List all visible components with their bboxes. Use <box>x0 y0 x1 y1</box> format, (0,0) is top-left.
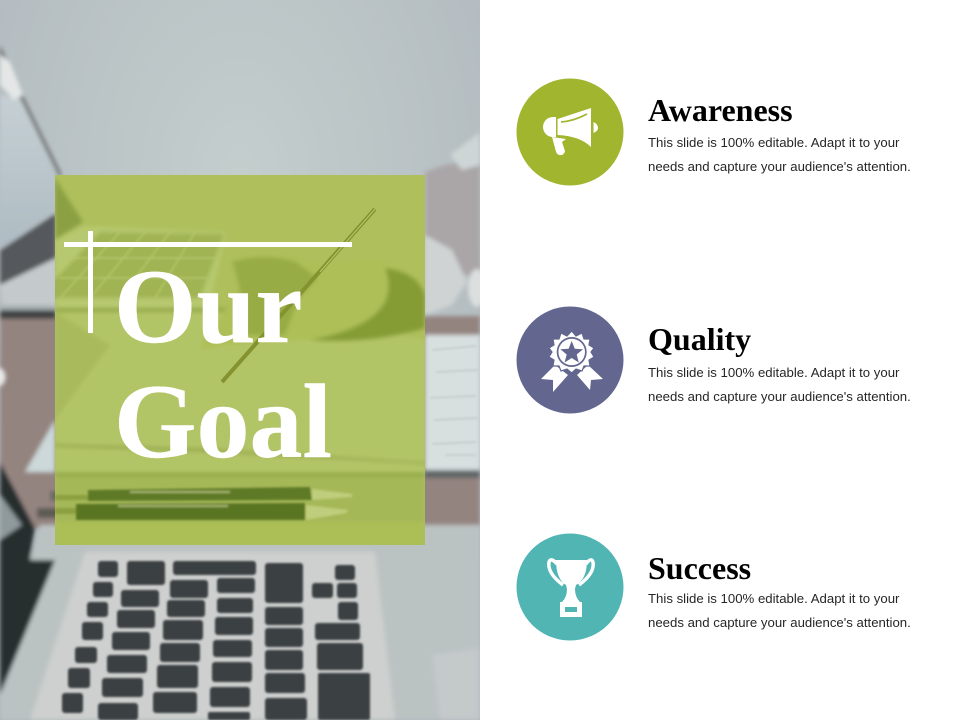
heading: Success: Success <box>648 550 751 586</box>
background photo: desk with laptops and green overlay panel <box>0 0 480 720</box>
title: Our Goal <box>114 248 332 480</box>
text: Awareness description: This slide is 100% editable. Adapt it to your <box>648 135 899 150</box>
pencil <box>222 209 375 382</box>
title horizontal rule <box>64 242 352 247</box>
icon: trophy in teal circle <box>516 534 624 640</box>
green overlay panel <box>37 175 425 545</box>
icon: megaphone in green circle <box>516 78 624 186</box>
text: Success description <box>648 591 911 630</box>
text: Quality description: This slide is 100% editable. Adapt it to your <box>648 365 899 380</box>
text: Success description: This slide is 100% editable. Adapt it to your <box>648 591 899 606</box>
keyboard rows under overlay <box>60 232 215 298</box>
heading: Quality: Quality <box>648 321 751 357</box>
text: Quality description <box>648 365 911 404</box>
text: Quality description: needs and capture your audience's attention. <box>648 389 911 404</box>
text: Awareness description <box>648 135 911 174</box>
icon: award ribbon in purple circle <box>516 306 624 414</box>
paper scribbles <box>430 346 478 455</box>
title vertical rule <box>88 231 93 333</box>
heading: Awareness: Awareness <box>648 92 793 128</box>
keyboard keys <box>62 561 370 720</box>
title: Our Goal: Goal <box>114 363 332 480</box>
text: Success description: needs and capture your audience's attention. <box>648 615 911 630</box>
text: Awareness description: needs and capture your audience's attention. <box>648 159 911 174</box>
title: Our Goal: Our <box>114 248 302 365</box>
pens <box>55 487 352 520</box>
